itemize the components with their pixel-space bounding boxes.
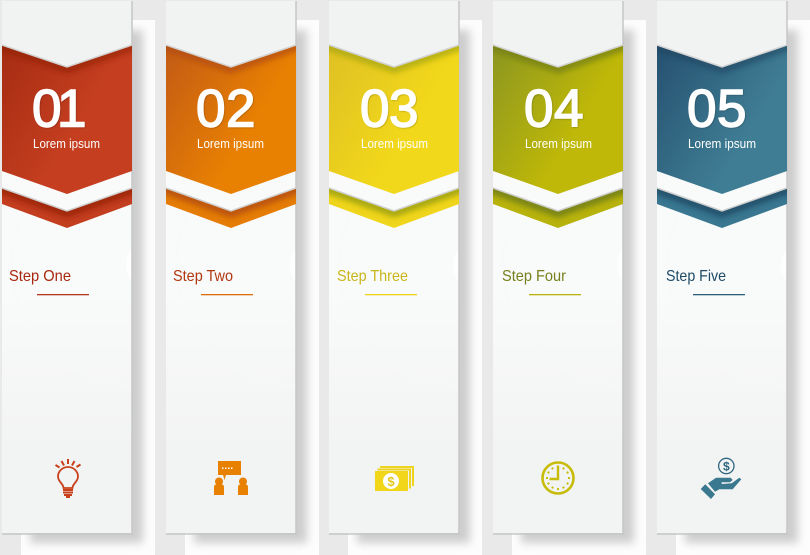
lower chevron <box>324 188 464 228</box>
label: Lorem ipsum <box>361 137 428 151</box>
number: 01 <box>32 80 86 138</box>
label: Lorem ipsum <box>525 137 592 151</box>
top chevron <box>0 45 137 194</box>
step heading: Step Two <box>173 268 233 285</box>
card <box>493 1 624 535</box>
step heading: Step Three <box>337 268 408 285</box>
lower chevron <box>161 188 301 228</box>
icon: banknotes: $ <box>387 474 395 489</box>
top chevron <box>324 45 464 194</box>
panel: step four <box>493 1 624 535</box>
underline <box>529 294 581 295</box>
card <box>2 1 133 535</box>
back panel 2 <box>185 20 319 555</box>
back panel 3 <box>348 20 482 555</box>
number: 05 <box>687 80 746 138</box>
step heading: Step Four <box>502 268 567 285</box>
label: Lorem ipsum <box>197 137 264 151</box>
icon: hand holding coin: $ <box>723 460 730 474</box>
icon: light bulb <box>56 459 80 497</box>
underline <box>365 294 417 295</box>
top chevron <box>488 45 628 194</box>
icon: hand holding coin <box>701 458 741 499</box>
number: 03 <box>360 80 418 138</box>
label: Lorem ipsum <box>688 137 756 151</box>
lower chevron <box>652 188 792 228</box>
step heading: Step Five <box>666 268 726 285</box>
back panel 4 <box>512 20 646 555</box>
panel: step two <box>166 1 297 535</box>
lower chevron <box>488 188 628 228</box>
number: 02 <box>196 80 255 138</box>
number: 04 <box>524 80 583 138</box>
panel: step three <box>329 1 460 535</box>
panel: step five <box>657 1 788 535</box>
icon: two people talking <box>214 461 248 495</box>
step heading: Step One <box>9 268 71 285</box>
card <box>329 1 460 535</box>
top chevron <box>161 45 301 194</box>
card <box>657 1 788 535</box>
icon: clock <box>542 462 574 494</box>
underline <box>201 294 253 295</box>
lower chevron <box>0 188 137 228</box>
label: Lorem ipsum <box>33 137 100 151</box>
back panel 5 <box>676 20 810 555</box>
underline <box>37 294 89 295</box>
panel: step one <box>2 1 133 535</box>
back panel 1 <box>21 20 155 555</box>
icon: banknotes <box>375 466 414 491</box>
card <box>166 1 297 535</box>
top chevron <box>652 45 792 194</box>
underline <box>693 294 745 295</box>
